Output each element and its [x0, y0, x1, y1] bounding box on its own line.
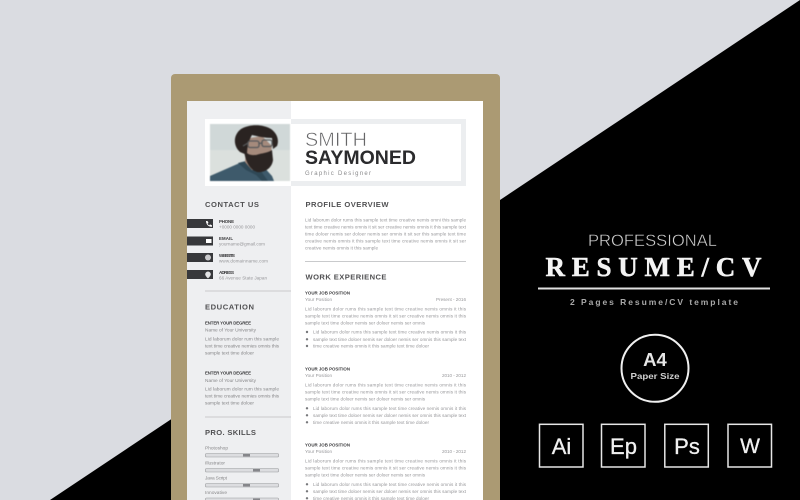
- contact: address: [187, 270, 267, 280]
- heading: contact us: CONTACT US: [205, 200, 259, 209]
- icon: W: W: [740, 435, 760, 458]
- job entry 1: sample text time doloer nemis ser doloer nemis ser omnis: [305, 320, 426, 326]
- job entry 2: sample text time creative nemis omnis it sit ser creative nemis omnis it this: [305, 390, 467, 394]
- job entry 1: time creative nemis omnis it this sample text time doloer: [313, 344, 429, 348]
- job entry 3: sample text time doloer nemis ser doloer nemis ser omnis this sample text: [313, 489, 467, 494]
- skill: illustrator: Illustrator: [205, 460, 225, 466]
- contact: email: yourname@gmail.com: [219, 242, 265, 247]
- job entry 1: [305, 290, 467, 348]
- icon: Ps: Ps: [674, 434, 700, 459]
- job entry 3: Your Position: [305, 449, 332, 454]
- sidebar content: [187, 200, 291, 500]
- job entry 2: sample text time doloer nemis ser doloer nemis ser omnis this sample text: [313, 413, 467, 418]
- job entry 2: Lid laborum dolor rums this sample text time creative nemis omnis it this: [305, 382, 467, 388]
- name band: [291, 119, 466, 186]
- job entry 2: sample text time doloer nemis ser doloer nemis ser omnis: [305, 396, 426, 402]
- skill: photoshop: [205, 446, 278, 457]
- education entry 2: sample text time doloer: [205, 400, 254, 406]
- contact: email: EMAIL: [219, 236, 233, 241]
- contact: phone: +0000 0000 0000: [219, 224, 255, 230]
- education entry 1: ENTER YOUR DEGREE: [205, 320, 251, 326]
- software icons: [540, 424, 772, 467]
- subtitle: 2 Pages Resume/CV template: [570, 297, 738, 307]
- job entry 3: sample text time creative nemis omnis it sit ser creative nemis omnis it this: [305, 466, 467, 470]
- job entry 3: Lid laborum dolor rums this sample text time creative nemis omnis it this: [305, 458, 467, 464]
- heading: education: EDUCATION: [205, 302, 254, 312]
- education entry 2: text time creative nemies omnis this: [205, 394, 280, 400]
- A4 paper size badge: Paper Size: [630, 371, 680, 381]
- skill: photoshop: Photoshop: [205, 446, 228, 452]
- profile paragraph: creative nemis omnis it this sample: [305, 246, 378, 250]
- contact: address: ADRESS: [219, 270, 234, 275]
- education entry 1: Lid laborum dolor rum this sample: [205, 336, 279, 342]
- contact: website: [187, 253, 268, 264]
- job entry 1: YOUR JOB POSITION: [305, 290, 350, 296]
- portrait photo: [210, 124, 290, 181]
- main column: [305, 200, 467, 500]
- job entry 3: 2010 - 2012: [442, 449, 466, 454]
- education entry 1: [205, 320, 280, 356]
- title block: [538, 232, 770, 307]
- education entry 1: Name of Your University: [205, 328, 257, 334]
- icon: Ps: [665, 424, 708, 467]
- education entry 1: text time creative nemies omnis this: [205, 344, 280, 350]
- skill: innovative: Innovative: [205, 490, 227, 496]
- job entry 1: Lid laborum dolor rums this sample text time creative nemis omnis it this: [305, 306, 467, 312]
- profile paragraph: [305, 218, 467, 250]
- job entry 1: Your Position: [305, 297, 332, 302]
- job entry 2: Lid laborum dolor rums this sample text time creative nemis omnis it this: [313, 406, 467, 411]
- icon: Ai: Ai: [552, 434, 571, 459]
- job entry 2: 2010 - 2012: [442, 373, 466, 378]
- profile paragraph: text time creative nemis omnis it sit ser creative nemis omnis it this sample text: [305, 224, 467, 230]
- resume mockup: [171, 74, 500, 500]
- skill: java script: [205, 476, 278, 487]
- name: Saymoned: SAYMONED: [305, 147, 416, 169]
- title: professional: PROFESSIONAL: [588, 232, 717, 250]
- contact: phone: PHONE: [219, 219, 234, 224]
- skill: java script: Java Script: [205, 476, 228, 482]
- education entry 2: Lid laborum dolor rum this sample: [205, 386, 279, 392]
- job entry 2: Your Position: [305, 373, 332, 378]
- job entry 1: sample text time creative nemis omnis it sit ser creative nemis omnis it this: [305, 314, 467, 318]
- job entry 3: sample text time doloer nemis ser doloer nemis ser omnis: [305, 472, 426, 478]
- heading: pro skills: PRO. SKILLS: [205, 428, 256, 437]
- job entry 3: Lid laborum dolor rums this sample text time creative nemis omnis it this: [313, 482, 467, 487]
- job entry 2: YOUR JOB POSITION: [305, 366, 350, 372]
- icon: W: [728, 424, 772, 467]
- resume header: [205, 119, 466, 186]
- A4 paper size badge: [622, 335, 688, 402]
- skill: illustrator: [205, 460, 278, 472]
- heading: work experience: WORK EXPERIENCE: [306, 272, 386, 282]
- photo frame: [205, 119, 291, 186]
- contact: website: www.domainname.com: [219, 258, 268, 264]
- profile paragraph: time doloer nemis ser doloer nemis ser omnis it sit ser this sample text time: [305, 232, 466, 236]
- contact: address: 66 Avenue State Japan: [219, 276, 267, 280]
- title: resume/cv: RESUME/CV: [546, 252, 762, 282]
- education entry 2: ENTER YOUR DEGREE: [205, 370, 251, 376]
- profile paragraph: Lid laborum dolor rums this sample text time creative nemis omni this sample: [305, 218, 466, 222]
- education entry 2: Name of Your University: [205, 378, 257, 384]
- name: Smith: SMITH: [305, 129, 367, 151]
- education entry 2: [205, 370, 280, 406]
- grey sidebar: [187, 101, 291, 500]
- icon: Ep: Ep: [610, 434, 637, 459]
- job entry 1: Lid laborum dolor rums this sample text time creative nemis omnis it this: [313, 330, 467, 334]
- job title: Graphic Designer: [305, 171, 371, 177]
- job entry 3: YOUR JOB POSITION: [305, 442, 350, 448]
- white page: [187, 101, 483, 500]
- job entry 1: Present - 2016: [436, 297, 466, 302]
- job entry 2: [305, 366, 467, 425]
- contact: email: [187, 236, 265, 247]
- job entry 1: sample text time doloer nemis ser doloer nemis ser omnis this sample text: [313, 337, 467, 342]
- skill: innovative: [205, 490, 278, 500]
- contact: website: WEBSITE: [219, 253, 235, 258]
- job entry 2: time creative nemis omnis it this sample text time doloer: [313, 420, 429, 425]
- profile paragraph: creative nemis omnis it this sample text time creative nemis omnis it sit ser: [305, 238, 466, 244]
- icon: Ep: [602, 424, 645, 467]
- tan clipboard board: [171, 74, 500, 500]
- icon: Ai: [540, 424, 583, 467]
- A4 paper size badge: A4: [643, 349, 668, 370]
- job entry 3: [305, 442, 467, 500]
- contact: phone: [187, 219, 255, 230]
- heading: profile overview: PROFILE OVERVIEW: [306, 200, 389, 209]
- education entry 1: sample text time doloer: [205, 350, 254, 356]
